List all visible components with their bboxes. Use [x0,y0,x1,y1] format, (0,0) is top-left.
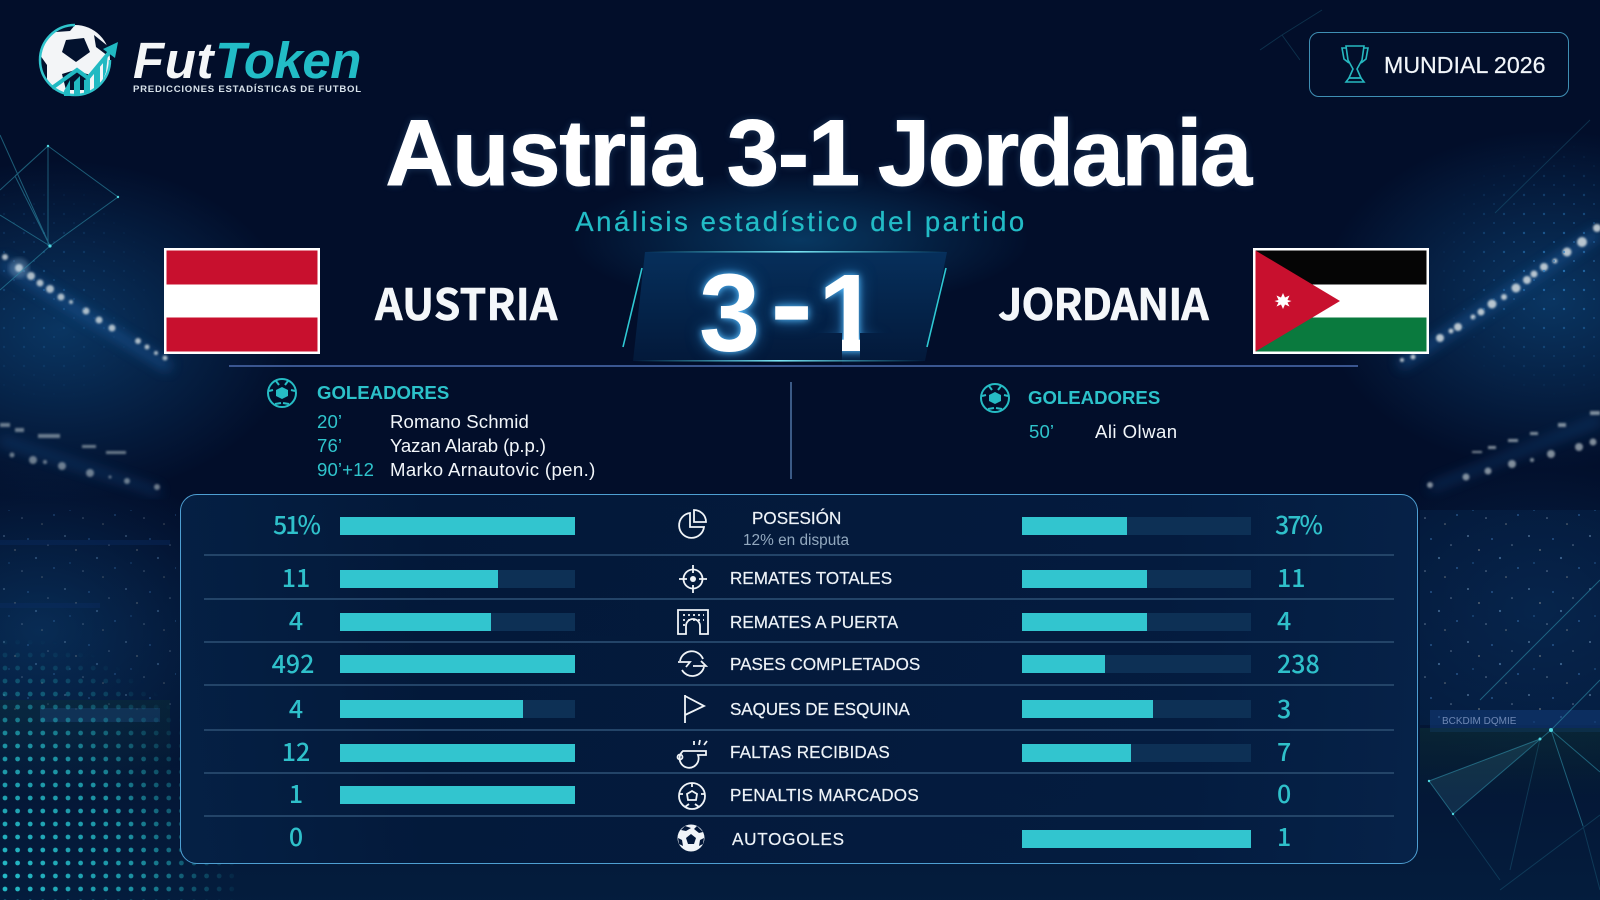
icon: ball [267,378,297,408]
icon: ball [678,824,704,852]
score digits: 3 [699,252,760,375]
heading: GOLEADORES [1028,387,1160,408]
subtitle: Análisis estadístico del partido [575,206,1027,237]
panel: Jordan scorers [980,383,1178,442]
row: posesión: 37% [1275,506,1321,542]
title: Austria 3-1 Jordania [385,100,1250,205]
team: Jordania: JORDANIA [998,271,1208,333]
scorer row: 50’ [1029,421,1054,442]
team: Austria: AUSTRIA [375,271,557,333]
row: posesión: 51% [273,506,319,542]
row: pases completados [272,645,1320,681]
icon: corner flag [684,695,706,723]
panel: Austria scorers: Marko Arnautovic (pen.) [390,459,596,480]
halftone dots [2,652,234,900]
score plate [622,241,947,375]
icon: target [679,565,707,593]
score digits: - [770,241,813,366]
icon: penalty ball [678,782,706,810]
row: penaltis marcados [289,775,1291,811]
row: faltas recibidas: 7 [1277,733,1291,769]
logo [38,24,362,96]
flag: Jordan [1253,248,1429,354]
icon: ball [980,383,1010,413]
row: posesión: 12% en disputa [743,532,849,549]
row: faltas recibidas [282,733,1291,769]
badge: Mundial 2026 [1309,32,1569,97]
row: autogoles: AUTOGOLES [732,830,845,849]
row: remates totales: 11 [282,559,310,595]
icon: goal [677,609,709,635]
panel: Austria scorers: 76’ [317,435,342,456]
panel: Austria scorers [267,378,596,480]
row: remates a puerta: 4 [1277,602,1291,638]
row: penaltis marcados: PENALTIS MARCADOS [730,786,919,805]
panel: Austria scorers: Yazan Alarab (p.p.) [390,435,546,456]
row: penaltis marcados: 0 [1277,775,1291,811]
row: penaltis marcados: 1 [289,775,303,811]
icon: football with growth arrow [38,24,118,96]
score digits [694,241,878,375]
badge text: MUNDIAL 2026 [1384,52,1546,78]
scorer rows: 20’ [317,411,342,432]
row: remates totales: 11 [1277,559,1306,595]
score digits: 1 [818,252,879,375]
panel: Austria scorers: 90’+12 [317,459,374,480]
row: remates totales [282,559,1306,595]
row: autogoles [289,818,1291,854]
icon: pie chart [678,509,707,539]
wordmark: FutToken [133,32,361,89]
row: remates totales: REMATES TOTALES [730,569,892,588]
row: remates a puerta: REMATES A PUERTA [730,613,898,632]
icon: passes [678,650,708,677]
row: saques de esquina: SAQUES DE ESQUINA [730,700,910,719]
divider under score [229,365,1358,367]
row: autogoles: 0 [289,818,303,854]
row: posesión: POSESIÓN [752,509,841,528]
crowd: BCKDIM DQMIE [1442,716,1517,727]
row: autogoles: 1 [1277,818,1291,854]
crowd [0,510,1600,798]
panel: Jordan scorers: Ali Olwan [1095,421,1178,442]
row: pases completados: 492 [272,645,314,681]
tagline: PREDICCIONES ESTADÍSTICAS DE FUTBOL [133,84,362,95]
row: saques de esquina [289,690,1291,726]
row: remates a puerta [289,602,1291,638]
row: faltas recibidas: 12 [282,733,310,769]
stadium lights [0,224,1600,490]
row: saques de esquina: 3 [1277,690,1291,726]
row: faltas recibidas: FALTAS RECIBIDAS [730,743,890,762]
icon: trophy [1341,45,1369,83]
icon: whistle [676,740,708,769]
row: remates a puerta: 4 [289,602,303,638]
flag: Austria [164,248,320,354]
row: pases completados: PASES COMPLETADOS [730,655,920,674]
row: saques de esquina: 4 [289,690,303,726]
row: pases completados: 238 [1277,645,1320,681]
panel: Austria scorers: Romano Schmid [390,411,529,432]
heading: GOLEADORES [317,382,449,403]
row: posesión [273,506,1322,549]
